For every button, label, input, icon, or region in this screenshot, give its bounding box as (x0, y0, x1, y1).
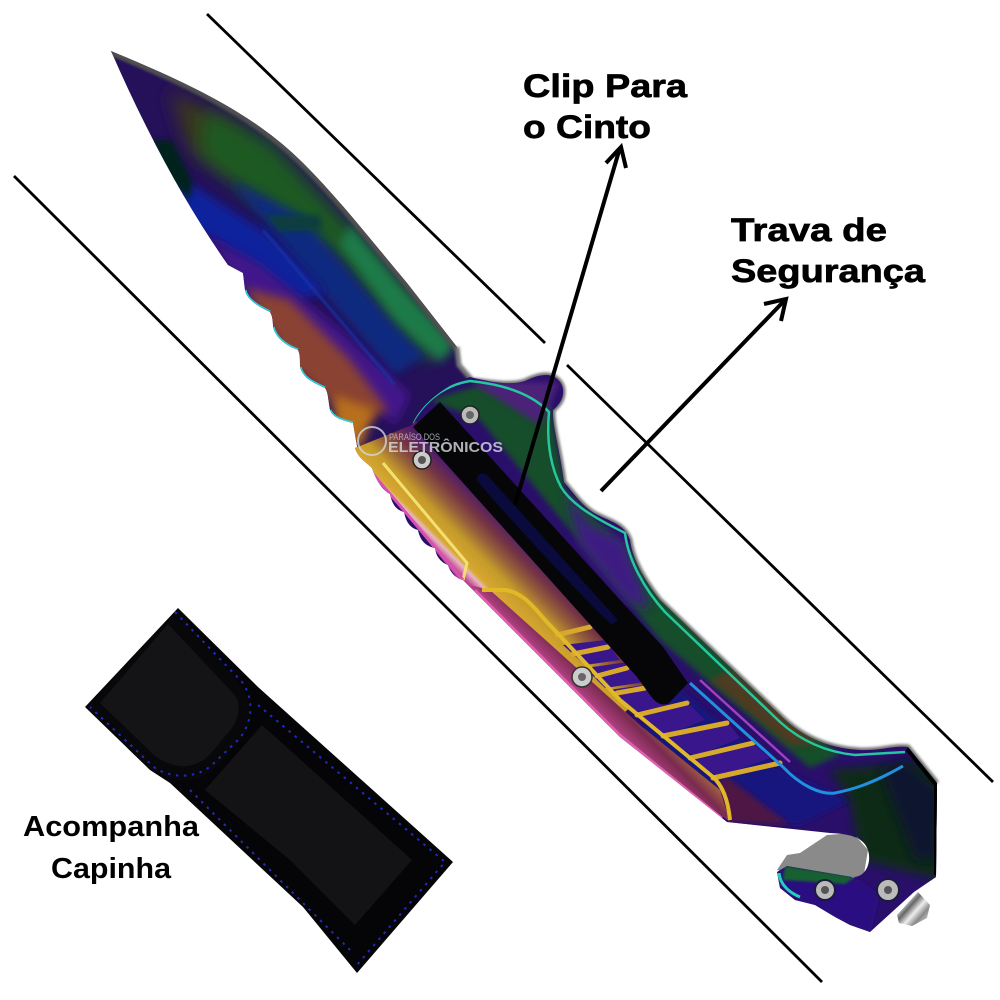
label: safety lock: Segurança (731, 253, 925, 289)
teal highlight line (412, 381, 905, 755)
sheath inner pocket (205, 725, 412, 925)
knife handle (340, 347, 950, 940)
label: safety lock: Trava de (731, 212, 887, 248)
label: sheath (23, 811, 200, 885)
arrow: belt clip (515, 147, 626, 505)
handle body (340, 360, 950, 940)
back upper green (430, 385, 840, 768)
label: sheath: Capinha (51, 853, 172, 885)
watermark logo (358, 427, 503, 456)
blue stitching (90, 612, 445, 965)
label: belt clip: o Cinto (523, 109, 651, 145)
sheath pouch (85, 608, 453, 973)
rear lower colours (640, 690, 850, 825)
blue highlight line (690, 683, 903, 793)
grey edge halo (457, 347, 937, 783)
lower rear pink strip (470, 585, 730, 822)
label: belt clip (523, 68, 687, 145)
watermark logo: ELETRÔNICOS (388, 438, 503, 456)
sheath flap (87, 610, 251, 780)
arrow: safety lock (601, 299, 786, 491)
label: sheath: Acompanha (23, 811, 200, 843)
clip slot (477, 474, 618, 625)
gold rail (482, 590, 730, 820)
ribs (563, 640, 770, 777)
label: belt clip: Clip Para (523, 68, 687, 104)
glass breaker tip (897, 892, 930, 926)
belt cutter steel (777, 833, 868, 880)
watermark logo: PARAÍSO DOS (389, 432, 440, 442)
label: safety lock (731, 212, 925, 289)
black belt clip (413, 402, 688, 705)
front lower scale (350, 420, 660, 735)
knife blade (111, 51, 469, 447)
screws (413, 406, 899, 901)
